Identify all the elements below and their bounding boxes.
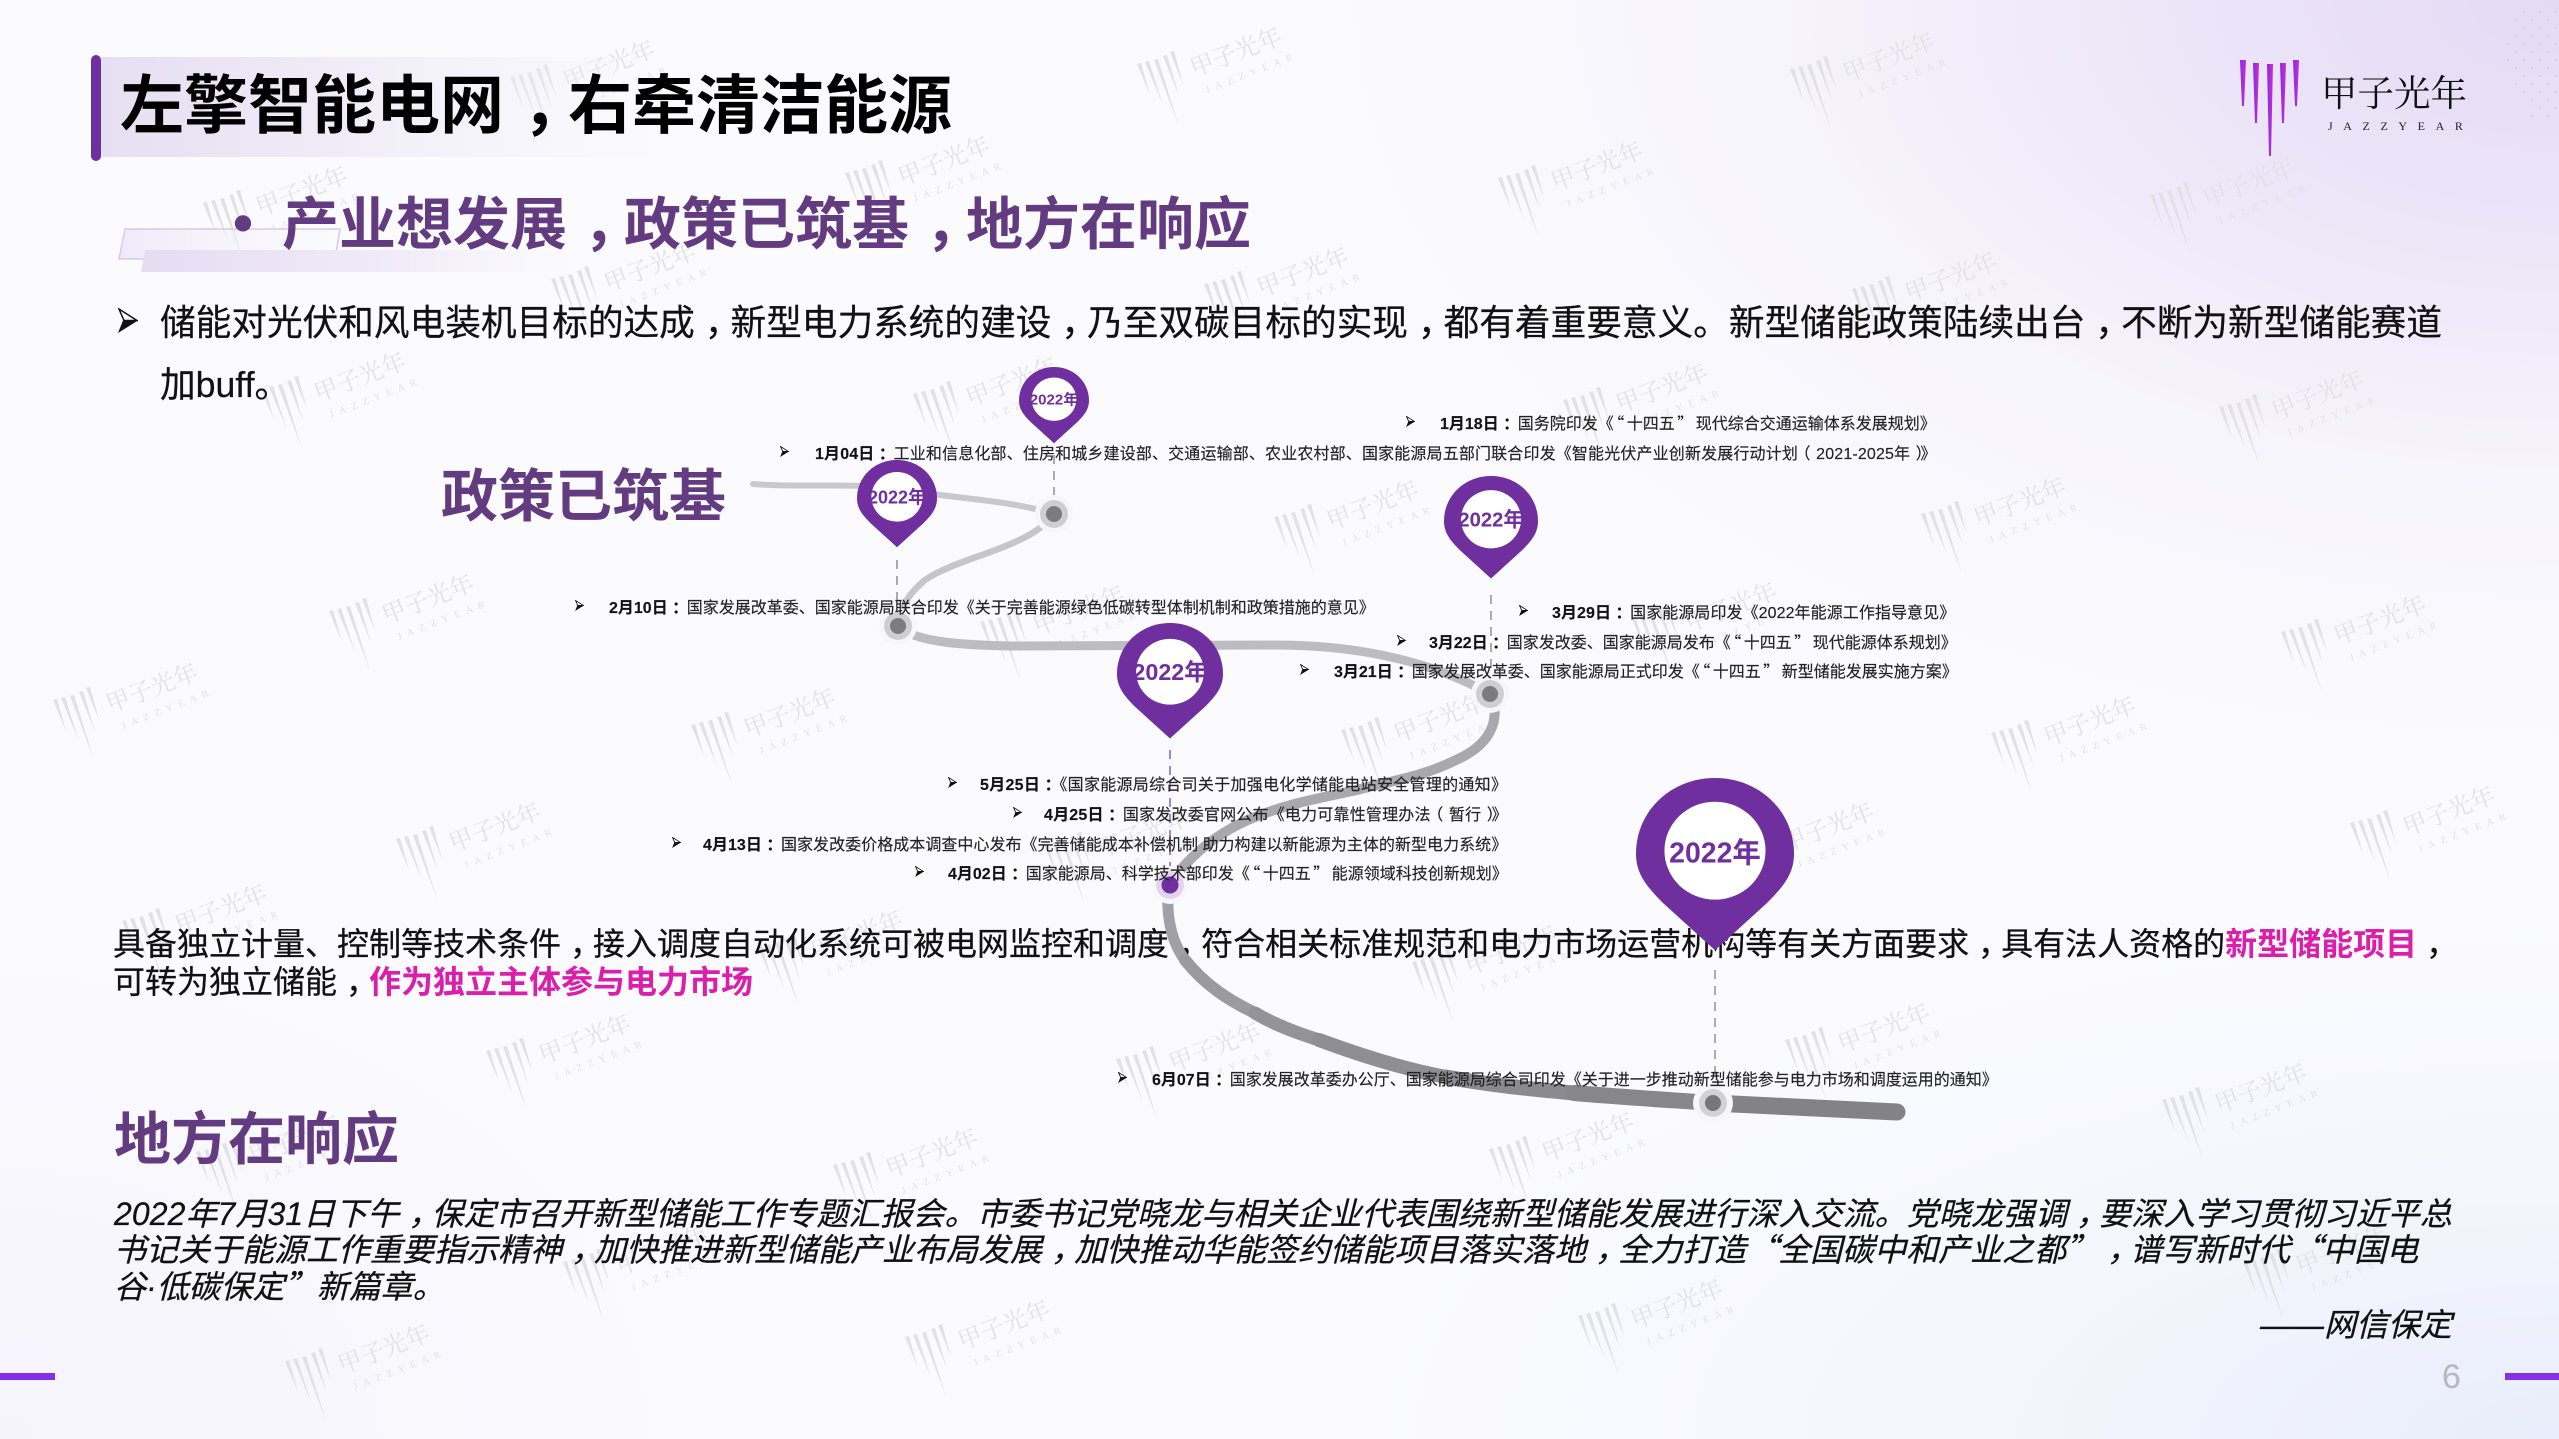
watermark pattern: JAZZYEAR bbox=[980, 380, 1076, 426]
watermark pattern: 甲子光年 bbox=[1778, 798, 1878, 858]
pin 5 bbox=[1636, 778, 1794, 950]
watermark pattern: 甲子光年 bbox=[1390, 689, 1490, 749]
watermark pattern: 甲子光年 bbox=[1253, 243, 1353, 303]
watermark pattern: 甲子光年 bbox=[2292, 1221, 2392, 1281]
watermark pattern: 甲子光年 bbox=[445, 798, 545, 858]
footer bar left bbox=[0, 1373, 55, 1380]
watermark pattern: JAZZYEAR bbox=[825, 933, 921, 979]
label 4月02日 bbox=[915, 860, 1508, 884]
watermark pattern: 甲子光年 bbox=[1681, 578, 1781, 638]
timeline labels: 1月04日 ：工业和信息化部、住房和城乡建设部、交通运输部、农业农村部、国家能源局五部门联合印发《智能光伏产业创新发展行动计划（ 2021-2025年 ）》 bbox=[815, 440, 1936, 464]
watermark pattern: 甲子光年 bbox=[2268, 366, 2368, 426]
pin 2 bbox=[857, 460, 937, 547]
watermark pattern: 甲子光年 bbox=[310, 348, 410, 408]
subtitle decoration bbox=[118, 228, 472, 272]
label 3月29日 bbox=[1519, 599, 1955, 623]
watermark pattern: 甲子光年 bbox=[740, 684, 840, 744]
watermark pattern: 甲子光年 bbox=[1029, 581, 1129, 641]
timeline nodes bbox=[879, 495, 1733, 1123]
watermark pattern: 甲子光年 bbox=[1839, 28, 1939, 88]
pin 4: 2022年 bbox=[1132, 659, 1208, 685]
watermark pattern: JAZZYEAR bbox=[263, 1138, 359, 1184]
timeline labels: 3月22日 ：国家发改委、国家能源局发布《“十四五”现代能源体系规划》 bbox=[1429, 629, 1957, 653]
quote source: ——网信保定 bbox=[2260, 1307, 2452, 1343]
watermark pattern: 甲子光年 bbox=[1538, 1108, 1638, 1168]
label 6月07日 bbox=[1118, 1066, 1998, 1090]
watermark pattern: JAZZYEAR bbox=[1988, 500, 2084, 546]
watermark pattern: JAZZYEAR bbox=[463, 825, 559, 871]
pin 3: 2022年 bbox=[1458, 509, 1524, 532]
pin 1 bbox=[1019, 367, 1089, 443]
watermark pattern: JAZZYEAR bbox=[1183, 1045, 1279, 1091]
watermark pattern: 甲子光年 bbox=[378, 570, 478, 630]
watermark pattern: JAZZYEAR bbox=[900, 1151, 996, 1197]
watermark pattern: JAZZYEAR bbox=[618, 265, 714, 311]
watermark pattern: 甲子光年 bbox=[894, 132, 994, 192]
timeline labels: 1月18日 ：国务院印发《“十四五”现代综合交通运输体系发展规划》 bbox=[1440, 410, 1936, 434]
watermark pattern: JAZZYEAR bbox=[396, 597, 492, 643]
label 3月21日 bbox=[1300, 658, 1958, 682]
watermark pattern: JAZZYEAR bbox=[1857, 55, 1953, 101]
watermark pattern: 甲子光年 bbox=[1461, 921, 1561, 981]
watermark pattern: JAZZYEAR bbox=[912, 159, 1008, 205]
label 4月13日 bbox=[672, 831, 1507, 855]
watermark pattern: JAZZYEAR bbox=[352, 1347, 448, 1393]
watermark pattern: JAZZYEAR bbox=[2229, 1086, 2325, 1132]
body paragraph bbox=[118, 295, 2442, 405]
page number: 6 bbox=[2442, 1358, 2461, 1396]
label 1月04日 bbox=[780, 440, 1936, 464]
subtitle text: 产业想发展 ，政策已筑基 ，地方在响应 bbox=[282, 179, 1251, 261]
watermark pattern: 甲子光年 bbox=[1186, 23, 1286, 83]
watermark pattern: 甲子光年 bbox=[1093, 804, 1193, 864]
quote line 3: 谷·低碳保定”新篇章。 bbox=[114, 1262, 445, 1308]
body line 2: 加buff。 bbox=[160, 365, 290, 405]
title accent bar bbox=[91, 55, 101, 161]
logo: JAZZYEAR bbox=[2328, 119, 2473, 133]
watermark pattern: 甲子光年 bbox=[954, 1296, 1054, 1356]
watermark pattern: JAZZYEAR bbox=[1271, 270, 1367, 316]
independent storage paragraph bbox=[113, 919, 2458, 1003]
timeline labels: 4月02日 ：国家能源局、科学技术部印发《“十四五”能源领域科技创新规划》 bbox=[948, 860, 1508, 884]
watermark pattern: 甲子光年 bbox=[1834, 999, 1934, 1059]
watermark pattern: 甲子光年 bbox=[1612, 359, 1712, 419]
watermark pattern: JAZZYEAR bbox=[2286, 393, 2382, 439]
watermark pattern: 甲子光年 bbox=[600, 238, 700, 298]
watermark pattern: JAZZYEAR bbox=[270, 189, 366, 235]
watermark pattern: JAZZYEAR bbox=[553, 1037, 649, 1083]
watermark pattern: JAZZYEAR bbox=[630, 1248, 726, 1294]
watermark pattern: JAZZYEAR bbox=[1479, 948, 1575, 994]
watermark pattern: JAZZYEAR bbox=[758, 711, 854, 757]
watermark pattern: 甲子光年 bbox=[2211, 1059, 2311, 1119]
watermark pattern: 甲子光年 bbox=[102, 659, 202, 719]
pin 2: 2022年 bbox=[868, 486, 926, 507]
watermark pattern: 甲子光年 bbox=[612, 1221, 712, 1281]
watermark pattern: 甲子光年 bbox=[252, 162, 352, 222]
news quote bbox=[114, 1189, 2452, 1308]
timeline labels bbox=[575, 410, 1998, 1090]
watermark pattern: 甲子光年 bbox=[807, 906, 907, 966]
title: 左擎智能电网 ，右牵清洁能源 bbox=[120, 55, 952, 147]
watermark pattern: 甲子光年 bbox=[1323, 476, 1423, 536]
watermark pattern: JAZZYEAR bbox=[1341, 503, 1437, 549]
watermark pattern: 甲子光年 bbox=[2199, 154, 2299, 214]
watermark pattern: JAZZYEAR bbox=[1111, 831, 1207, 877]
timeline labels: 4月13日 ：国家发改委价格成本调查中心发布《完善储能成本补偿机制 助力构建以新能源为主体的新型电力系统》 bbox=[703, 831, 1507, 855]
quote line 2: 书记关于能源工作重要指示精神 ，加快推进新型储能产业布局发展 ，加快推动华能签约储能项目落实落地 ，全力打造“全国碳中和产业之都” ，谱写新时代“中国电 bbox=[114, 1225, 2418, 1271]
watermark pattern: JAZZYEAR bbox=[2058, 719, 2154, 765]
watermark pattern: JAZZYEAR bbox=[120, 686, 216, 732]
timeline labels: 3月29日 ：国家能源局印发《2022年能源工作指导意见》 bbox=[1552, 599, 1955, 623]
watermark pattern: JAZZYEAR bbox=[1796, 825, 1892, 871]
watermark pattern: 甲子光年 bbox=[334, 1320, 434, 1380]
watermark pattern: JAZZYEAR bbox=[1565, 164, 1661, 210]
quote line 1: 2022年7月31日下午 ，保定市召开新型储能工作专题汇报会。市委书记党晓龙与相关企业代表围绕新型储能发展进行深入交流。党晓龙强调 ，要深入学习贯彻习近平总 bbox=[114, 1189, 2452, 1235]
watermark pattern: 甲子光年 bbox=[1547, 137, 1647, 197]
watermark pattern: JAZZYEAR bbox=[577, 63, 673, 109]
timeline labels: 2月10日 ：国家发展改革委、国家能源局联合印发《关于完善能源绿色低碳转型体制机制和政策措施的意见》 bbox=[609, 594, 1375, 618]
heading: local response: 地方在响应 bbox=[114, 1108, 399, 1172]
label 4月25日 bbox=[1013, 801, 1508, 825]
label 1月18日 bbox=[1406, 410, 1936, 434]
timeline road bbox=[753, 484, 1897, 1112]
watermark pattern: 甲子光年 bbox=[245, 1111, 345, 1171]
watermark pattern: JAZZYEAR bbox=[1047, 608, 1143, 654]
logo: 甲子光年 bbox=[2321, 73, 2467, 114]
watermark pattern: 甲子光年 bbox=[559, 36, 659, 96]
watermark pattern: JAZZYEAR bbox=[1204, 50, 1300, 96]
pin 1: 2022年 bbox=[1030, 391, 1078, 409]
watermark pattern: JAZZYEAR bbox=[1852, 1026, 1948, 1072]
watermark pattern: JAZZYEAR bbox=[2417, 809, 2513, 855]
watermark pattern: 甲子光年 bbox=[1165, 1018, 1265, 1078]
watermark pattern: JAZZYEAR bbox=[2348, 618, 2444, 664]
watermark pattern: JAZZYEAR bbox=[1630, 386, 1726, 432]
label 5月25日 bbox=[948, 771, 1507, 795]
watermark pattern: 甲子光年 bbox=[1970, 473, 2070, 533]
watermark pattern: JAZZYEAR bbox=[189, 907, 285, 953]
bullet arrow bbox=[118, 308, 138, 333]
watermark pattern: JAZZYEAR bbox=[2217, 181, 2313, 227]
pin 3 bbox=[1444, 476, 1538, 578]
pin 4 bbox=[1117, 623, 1223, 739]
label 2月10日 bbox=[575, 594, 1375, 618]
subtitle bullet: • bbox=[233, 191, 253, 255]
timeline labels: 3月21日 ：国家发展改革委、国家能源局正式印发《“十四五”新型储能发展实施方案》 bbox=[1334, 658, 1958, 682]
watermark pattern: JAZZYEAR bbox=[1408, 716, 1504, 762]
watermark pattern: JAZZYEAR bbox=[1556, 1135, 1652, 1181]
title band bbox=[101, 57, 661, 157]
paragraph line 2: 可转为独立储能 ，作为独立主体参与电力市场 bbox=[113, 957, 753, 1003]
watermark pattern: JAZZYEAR bbox=[2310, 1248, 2406, 1294]
paragraph line 1: 具备独立计量、控制等技术条件 ，接入调度自动化系统可被电网监控和调度 ，符合相关标准规范和电力市场运营机构等有关方面要求 ，具有法人资格的新型储能项目 ， bbox=[113, 919, 2458, 965]
watermark pattern: 甲子光年 bbox=[2330, 591, 2430, 651]
watermark pattern: 甲子光年 bbox=[2399, 782, 2499, 842]
pin 5: 2022年 bbox=[1669, 837, 1761, 869]
watermark pattern: 甲子光年 bbox=[882, 1124, 982, 1184]
watermark pattern: 甲子光年 bbox=[1901, 248, 2001, 308]
timeline labels: 6月07日 ：国家发展改革委办公厅、国家能源局综合司印发《关于进一步推动新型储能参与电力市场和调度运用的通知》 bbox=[1152, 1066, 1998, 1090]
dashed leaders bbox=[897, 455, 1715, 1085]
logo bbox=[2240, 60, 2473, 156]
timeline labels: 4月25日 ：国家发改委官网公布《电力可靠性管理办法（ 暂行 ）》 bbox=[1044, 801, 1508, 825]
watermark pattern: JAZZYEAR bbox=[1645, 1302, 1741, 1348]
watermark pattern: JAZZYEAR bbox=[1919, 275, 2015, 321]
footer bar right bbox=[2505, 1373, 2559, 1380]
watermark pattern: JAZZYEAR bbox=[328, 375, 424, 421]
watermark pattern: 甲子光年 bbox=[1627, 1275, 1727, 1335]
watermark pattern: JAZZYEAR bbox=[1699, 605, 1795, 651]
timeline labels: 5月25日 ：《国家能源局综合司关于加强电化学储能电站安全管理的通知》 bbox=[980, 771, 1507, 795]
watermark pattern: 甲子光年 bbox=[535, 1010, 635, 1070]
watermark pattern: 甲子光年 bbox=[171, 880, 271, 940]
label 3月22日 bbox=[1397, 629, 1957, 653]
watermark pattern: JAZZYEAR bbox=[972, 1323, 1068, 1369]
body line 1: 储能对光伏和风电装机目标的达成 ，新型电力系统的建设 ，乃至双碳目标的实现 ，都有着重要意义。新型储能政策陆续出台 ，不断为新型储能赛道 bbox=[160, 295, 2442, 346]
watermark pattern: 甲子光年 bbox=[962, 353, 1062, 413]
watermark pattern: 甲子光年 bbox=[2040, 692, 2140, 752]
heading: policy: 政策已筑基 bbox=[441, 465, 726, 529]
